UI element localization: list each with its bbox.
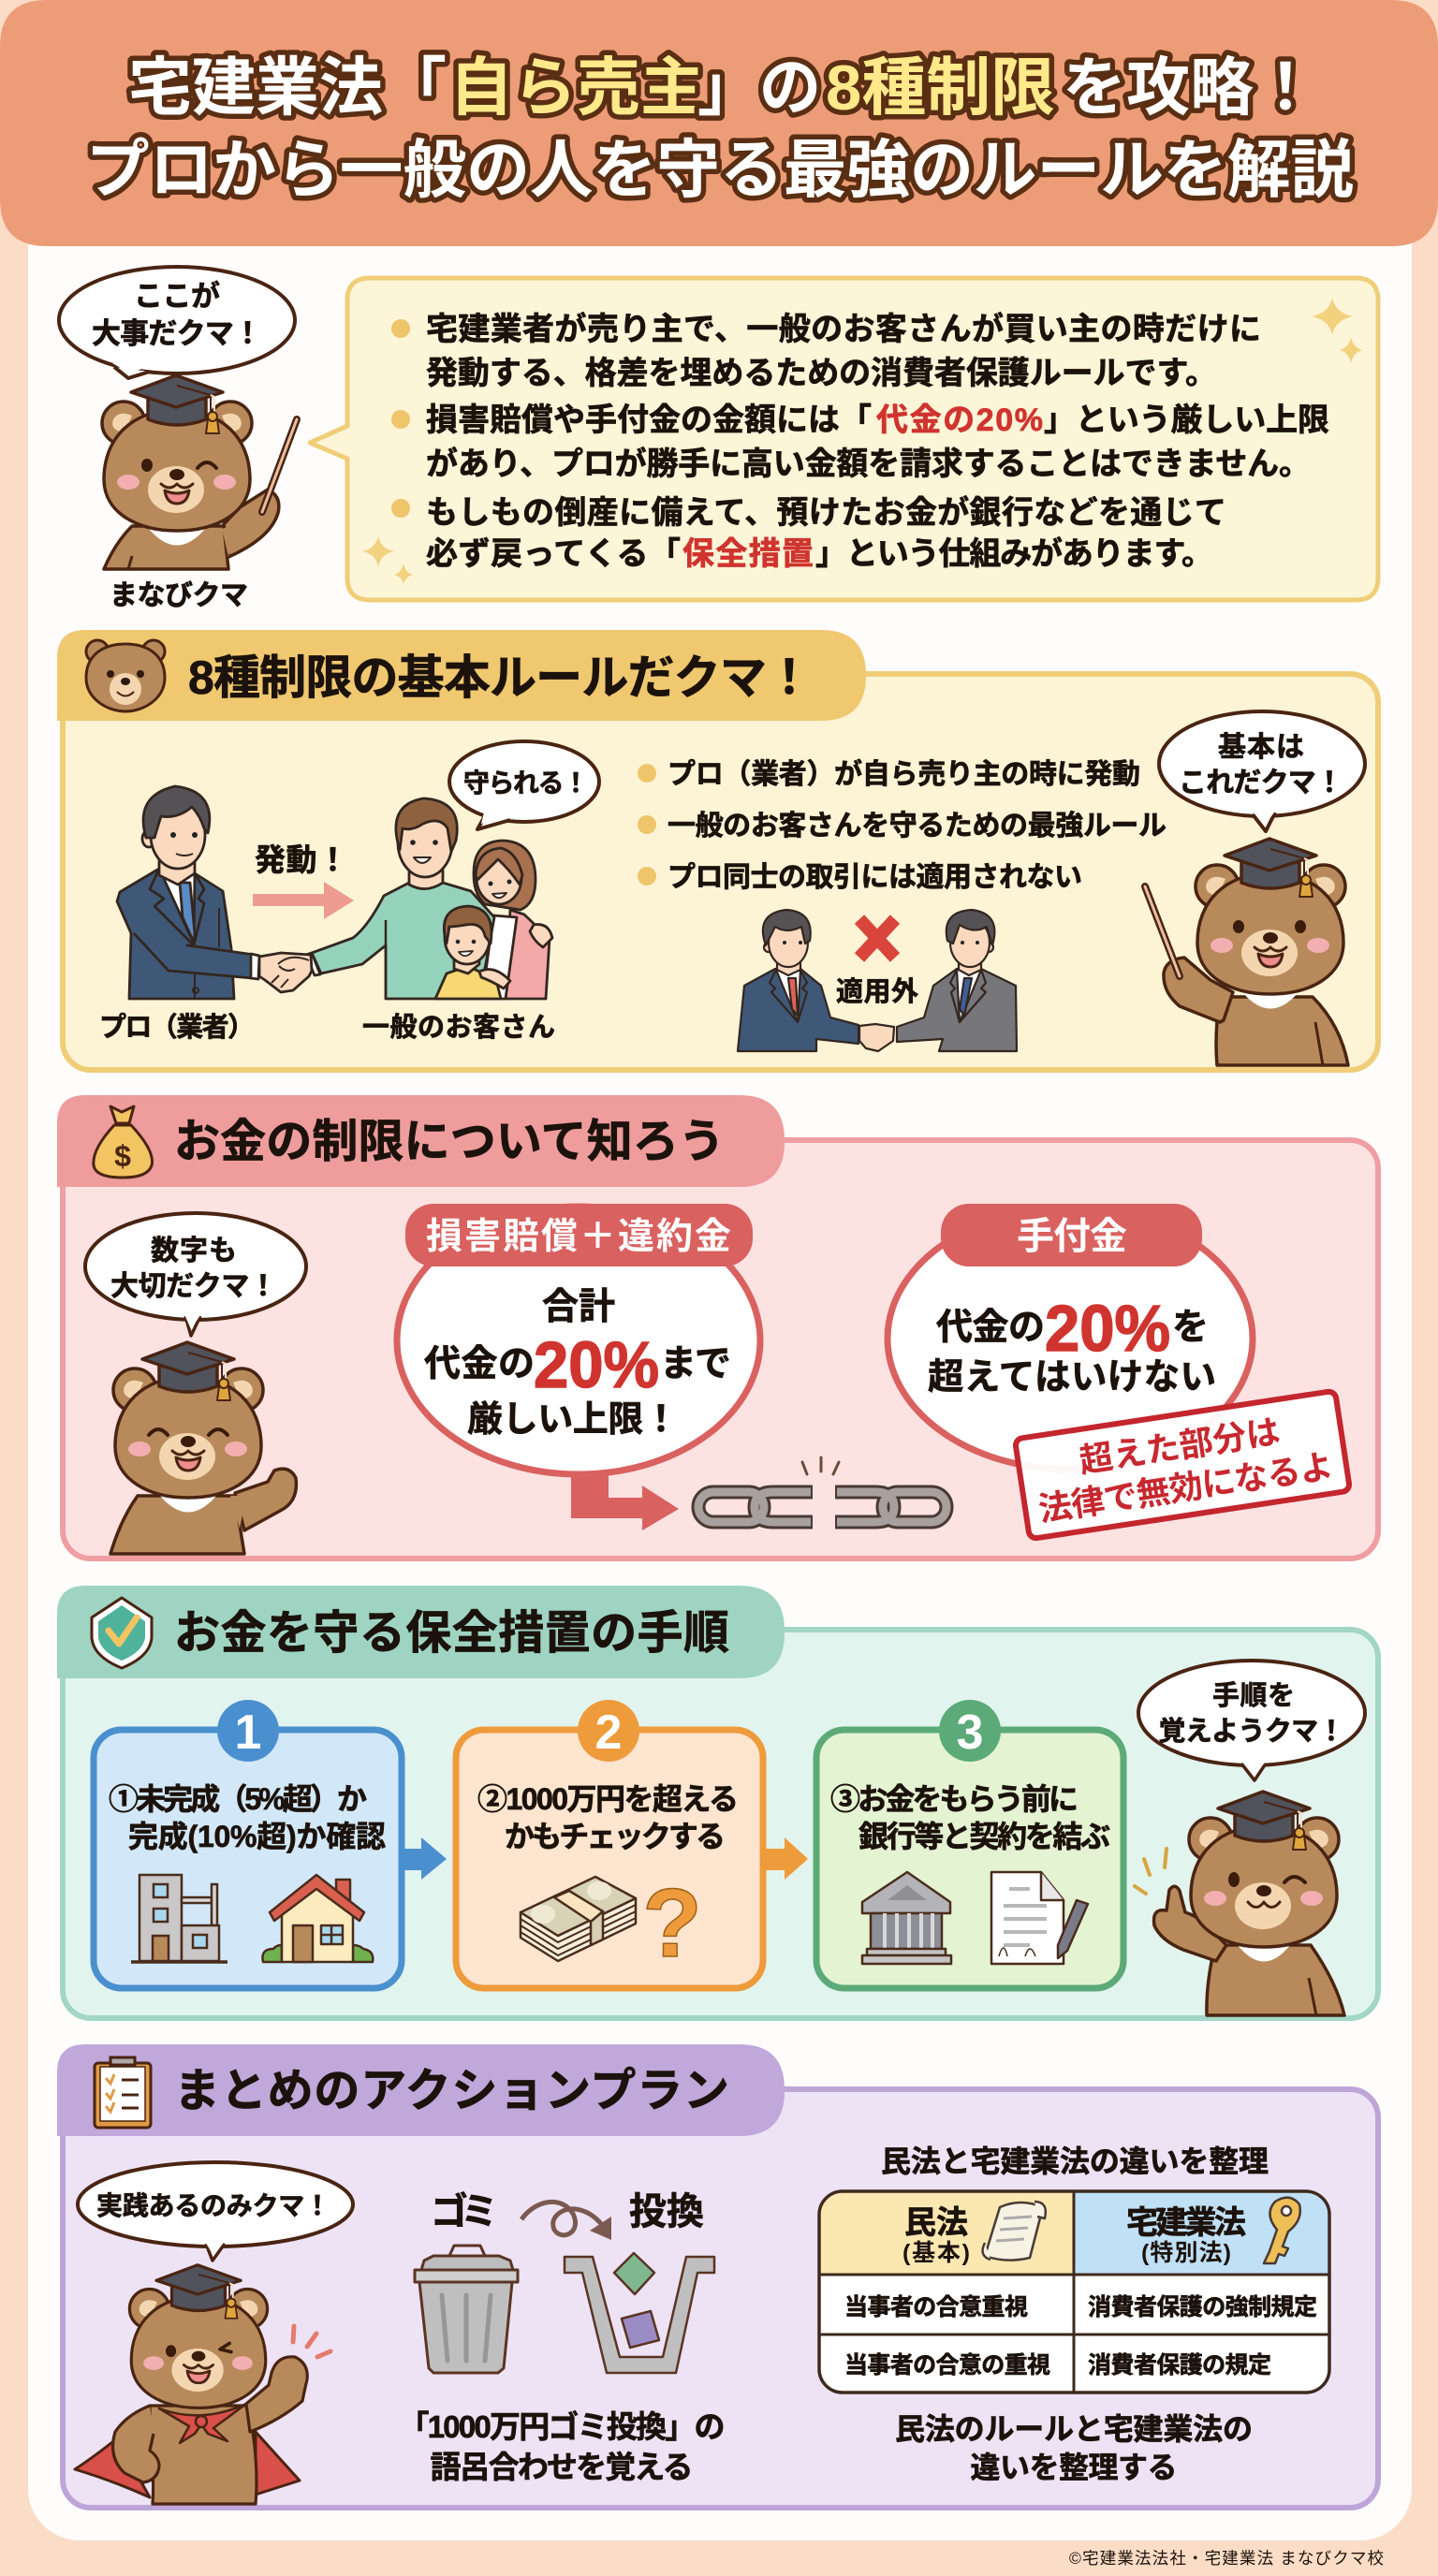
icon: unfinished building xyxy=(131,1875,227,1962)
section 1 header: 8種制限の基本ルールだクマ！ xyxy=(188,651,813,704)
section 2 bear xyxy=(110,1342,296,1554)
bubble: numbers matter: 大切だクマ！ xyxy=(110,1271,277,1302)
section 2 header: お金の制限について知ろう xyxy=(174,1117,725,1167)
icon: shield xyxy=(92,1598,152,1668)
bullet 3: 必ず戻ってくる「 xyxy=(426,536,681,572)
bullet 1: 宅建業者が売り主で、一般のお客さんが買い主の時だけに xyxy=(426,311,1261,347)
bullet 1: 発動する、格差を埋めるための消費者保護ルールです。 xyxy=(426,356,1217,391)
woman xyxy=(474,841,550,999)
caption: mnemonic: 語呂合わせを覚える xyxy=(431,2450,693,2484)
illustration: pro to pro excluded xyxy=(738,910,1017,1051)
section 4 bear with cape xyxy=(75,2265,307,2504)
intro: speech bubble xyxy=(59,267,295,378)
rule bullets: プロ同士の取引には適用されない xyxy=(668,862,1082,893)
step 1: 完成(10%超)か確認 xyxy=(128,1820,386,1853)
step 1 xyxy=(94,1700,402,1988)
card: damages plus penalty: 損害賠償＋違約金 xyxy=(426,1217,731,1257)
bullet 3: もしもの倒産に備えて、預けたお金が銀行などを通じて xyxy=(426,494,1226,531)
step 2: 2 xyxy=(595,1705,622,1760)
card: earnest money xyxy=(888,1204,1253,1470)
sparks xyxy=(293,2326,330,2357)
section 1 bear xyxy=(1145,839,1348,1065)
comparison table: 民法 xyxy=(904,2205,968,2241)
rule bullets: プロ（業者）が自ら売り主の時に発動 xyxy=(668,758,1140,790)
intro: summary callout xyxy=(310,278,1378,600)
bullet 2 xyxy=(391,402,1329,482)
section 1 panel: basic rules xyxy=(57,630,1378,1070)
card: damages plus penalty: 厳しい上限！ xyxy=(467,1400,679,1440)
section 3 panel: protection steps xyxy=(57,1586,1378,2018)
bubble: learn the steps xyxy=(1138,1661,1365,1780)
intro: speech bubble: ここが xyxy=(134,280,220,313)
copyright footer: ©宅建業法法社・宅建業法 まなびクマ校 xyxy=(1069,2549,1384,2568)
bubble: learn the steps: 手順を xyxy=(1212,1680,1295,1711)
handshake xyxy=(259,953,312,992)
comparison table: 消費者保護の規定 xyxy=(1088,2352,1271,2378)
bullet 2: があり、プロが勝手に高い金額を請求することはできません。 xyxy=(426,446,1311,482)
icon: trash can xyxy=(415,2246,518,2373)
illustration: professional shaking hands with family xyxy=(99,741,599,1043)
bullet 3: 保全措置 xyxy=(682,536,814,572)
caption: mnemonic xyxy=(399,2409,725,2484)
bubble: practice: 実践あるのみクマ！ xyxy=(96,2191,330,2220)
child xyxy=(435,906,552,999)
caption: law comparison: 違いを整理する xyxy=(970,2451,1178,2484)
bubble: the basics xyxy=(1159,711,1365,831)
label: gomi: ゴミ xyxy=(431,2191,498,2232)
step 3: ③お金をもらう前に xyxy=(830,1782,1078,1816)
card: damages plus penalty: 20% xyxy=(534,1328,659,1401)
arrow: triggers xyxy=(253,882,354,919)
arrow to broken chain xyxy=(571,1465,679,1530)
card: damages plus penalty: 代金の xyxy=(424,1344,535,1384)
icon: house xyxy=(262,1875,373,1962)
title banner: 宅建業法「 xyxy=(128,52,447,124)
step 3: 銀行等と契約を結ぶ xyxy=(858,1820,1110,1853)
bubble: protected xyxy=(449,741,599,829)
card: earnest money: 超えてはいけない xyxy=(928,1357,1216,1398)
section 1 header xyxy=(57,630,866,721)
title banner: 自ら売主 xyxy=(449,52,704,124)
step 1: 1 xyxy=(235,1705,261,1760)
section 3 bear xyxy=(1154,1792,1344,2015)
icon: key xyxy=(1264,2198,1300,2263)
bubble: practice xyxy=(78,2162,353,2261)
comparison table: 当事者の合意重視 xyxy=(844,2294,1028,2320)
title banner: を攻略！ xyxy=(1063,52,1317,124)
bullet 1 xyxy=(391,311,1261,391)
icon: money stack xyxy=(521,1877,636,1961)
bullet 2: 代金の20% xyxy=(876,402,1043,438)
broken chain xyxy=(698,1457,946,1522)
label: not applicable: 適用外 xyxy=(836,976,918,1007)
step 3: 3 xyxy=(957,1705,983,1760)
rule bullets xyxy=(638,758,1167,893)
step 2: ②1000万円を超える xyxy=(477,1782,739,1816)
step 1: ①未完成（5%超）か xyxy=(109,1782,367,1816)
icon: bank xyxy=(862,1872,951,1964)
bubble: protected: 守られる！ xyxy=(463,768,589,798)
card: damages plus penalty: まで xyxy=(660,1344,731,1384)
comparison table: 消費者保護の強制規定 xyxy=(1088,2294,1317,2320)
arrow: step 2 to 3 xyxy=(766,1837,808,1880)
card: earnest money: 20% xyxy=(1045,1292,1170,1365)
rule bullets: 一般のお客さんを守るための最強ルール xyxy=(668,811,1167,842)
bullet 2: 」という厳しい上限 xyxy=(1044,402,1329,438)
label: general customer: 一般のお客さん xyxy=(362,1012,555,1043)
comparison table xyxy=(819,2191,1329,2393)
title banner: 8種制限 xyxy=(826,52,1055,124)
section 4 panel: action plan xyxy=(57,2044,1378,2508)
bullet 3 xyxy=(391,494,1226,572)
arrow: curled xyxy=(521,2202,611,2240)
stamp: excess is void xyxy=(1015,1391,1350,1539)
icon: bear face xyxy=(86,640,165,711)
intro: mascot name: まなびクマ xyxy=(110,580,248,611)
stamp: excess is void: 法律で無効になるよ xyxy=(1035,1446,1336,1529)
father xyxy=(306,798,494,999)
stamp: excess is void: 超えた部分は xyxy=(1077,1412,1283,1480)
section 3 header xyxy=(57,1586,785,1678)
label: triggers: 発動！ xyxy=(255,842,348,877)
icon: insertion slot xyxy=(565,2253,714,2373)
bubble: numbers matter xyxy=(85,1213,306,1336)
icon: money bag xyxy=(94,1106,153,1178)
businessman xyxy=(117,786,259,999)
section 2 panel: money limits xyxy=(57,1095,1378,1559)
icon: contract and pen xyxy=(991,1872,1088,1964)
label: toukan: 投換 xyxy=(629,2191,704,2232)
bubble: numbers matter: 数字も xyxy=(151,1236,237,1266)
card: earnest money: 代金の xyxy=(936,1308,1045,1348)
icon: question mark: ? xyxy=(642,1869,702,1978)
step 2 xyxy=(456,1700,763,1988)
caption: law comparison: 民法のルールと宅建業法の xyxy=(895,2412,1253,2446)
icon: clipboard xyxy=(95,2057,151,2128)
title banner xyxy=(0,0,1438,246)
sparkles xyxy=(362,298,1362,584)
caption: mnemonic: 「1000万円ゴミ投換」の xyxy=(399,2409,725,2444)
card: damages plus penalty xyxy=(397,1204,760,1530)
icon: money bag: $ xyxy=(114,1139,131,1173)
section 3 header: お金を守る保全措置の手順 xyxy=(174,1608,729,1659)
card: damages plus penalty: 合計 xyxy=(542,1287,615,1327)
icon: scroll xyxy=(983,2202,1046,2261)
icon: red cross xyxy=(859,919,895,958)
comparison table: (特別法) xyxy=(1141,2240,1231,2266)
bubble: learn the steps: 覚えようクマ！ xyxy=(1159,1716,1344,1747)
caption: law comparison xyxy=(895,2412,1253,2484)
card: earnest money: を xyxy=(1172,1308,1209,1348)
sparks xyxy=(1135,1849,1167,1894)
step 2: かもチェックする xyxy=(505,1820,726,1853)
bubble: the basics: これだクマ！ xyxy=(1179,768,1343,798)
bullet 2: 損害賠償や手付金の金額には「 xyxy=(426,402,872,438)
section 4 header xyxy=(57,2044,785,2136)
title banner: 」の xyxy=(697,52,821,124)
comparison table: 宅建業法 xyxy=(1126,2205,1246,2241)
label: professional: プロ（業者） xyxy=(99,1012,255,1043)
intro: speech bubble: 大事だクマ！ xyxy=(92,317,262,350)
comparison table heading: 民法と宅建業法の違いを整理 xyxy=(881,2144,1269,2178)
arrow: step 1 to 2 xyxy=(400,1837,447,1880)
bubble: the basics: 基本は xyxy=(1218,732,1304,763)
card: earnest money: 手付金 xyxy=(1017,1216,1127,1257)
title banner: プロから一般の人を守る最強のルールを解説 xyxy=(86,135,1354,206)
step 3 xyxy=(816,1700,1123,1988)
comparison table: 当事者の合意の重視 xyxy=(844,2352,1050,2378)
comparison table: (基本) xyxy=(902,2240,970,2266)
intro: bear mascot xyxy=(102,375,297,569)
section 2 header xyxy=(57,1095,785,1187)
bullet 3: 」という仕組みがあります。 xyxy=(815,535,1213,572)
section 4 header: まとめのアクションプラン xyxy=(174,2066,729,2116)
